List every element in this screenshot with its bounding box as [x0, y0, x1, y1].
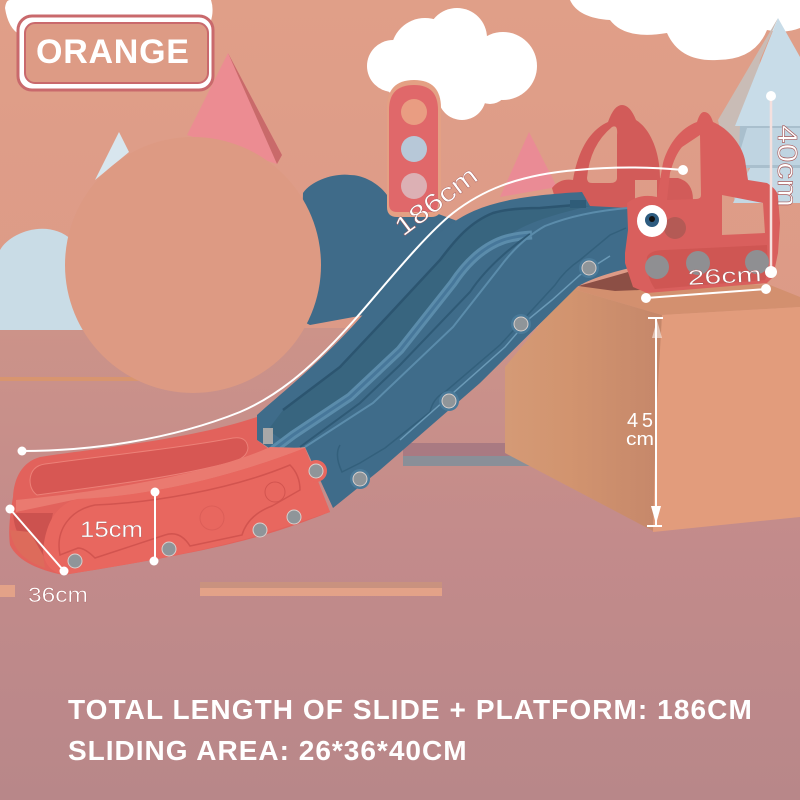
background wall	[0, 0, 800, 335]
big circle patch	[65, 137, 321, 393]
slide	[9, 192, 630, 575]
hill light blue	[0, 229, 120, 330]
scenery: clouds, mountains, tree, traffic light	[0, 0, 800, 597]
triangle pink small	[500, 132, 557, 197]
colour label badge	[18, 16, 213, 90]
cloud top left	[5, 0, 213, 35]
front rail ridges	[337, 228, 626, 472]
triangle pink large	[187, 53, 282, 164]
blue chute body	[257, 192, 630, 508]
screws	[68, 261, 596, 568]
caption	[68, 694, 753, 766]
dimension: 45cm: cm	[626, 429, 654, 449]
red chute	[9, 417, 330, 575]
chute groove	[30, 438, 248, 495]
dimension: 45cm: 45	[627, 410, 653, 432]
cloud top right	[570, 0, 800, 60]
dimension: 26cm: 26cm	[687, 263, 762, 290]
seat hole	[664, 217, 686, 239]
screw bosses	[305, 460, 327, 482]
dimension: 26cm	[641, 263, 771, 303]
tree light blue	[718, 18, 800, 203]
plate under platform	[403, 443, 513, 456]
dimension: 15cm	[80, 488, 160, 566]
dimension: 186cm curve	[18, 160, 688, 456]
chute end notch	[570, 200, 586, 208]
dimension: 40cm	[765, 91, 800, 278]
floor strips	[0, 377, 140, 381]
triangle light small	[95, 132, 129, 180]
chute mouth	[13, 513, 53, 557]
dimension: 36cm: 36cm	[28, 584, 88, 607]
icon: eye	[637, 205, 667, 237]
hill dark blue	[300, 175, 460, 325]
front seat panel	[625, 112, 780, 293]
caption: TOTAL LENGTH OF SLIDE + PLATFORM: 186CM	[68, 694, 753, 725]
floor	[0, 328, 800, 800]
caption: SLIDING AREA: 26*36*40CM	[68, 735, 468, 766]
rear seat panel	[552, 105, 693, 215]
clip	[263, 428, 273, 444]
chute floor	[268, 205, 590, 442]
dimension: 186cm curve: 186cm	[389, 160, 483, 242]
strip above rail	[16, 447, 305, 512]
cloud centre	[367, 8, 537, 120]
platform box	[505, 272, 800, 532]
chute ridge	[273, 235, 532, 450]
dimension: 45cm	[626, 318, 663, 526]
red front rail	[43, 448, 330, 575]
colour label badge: ORANGE	[36, 33, 190, 71]
bolts	[645, 250, 769, 279]
seat groove	[647, 245, 768, 289]
front rail edge	[305, 208, 628, 447]
dimension: 15cm: 15cm	[80, 517, 143, 542]
traffic light	[387, 80, 441, 217]
dimension: 36cm	[6, 504, 88, 607]
